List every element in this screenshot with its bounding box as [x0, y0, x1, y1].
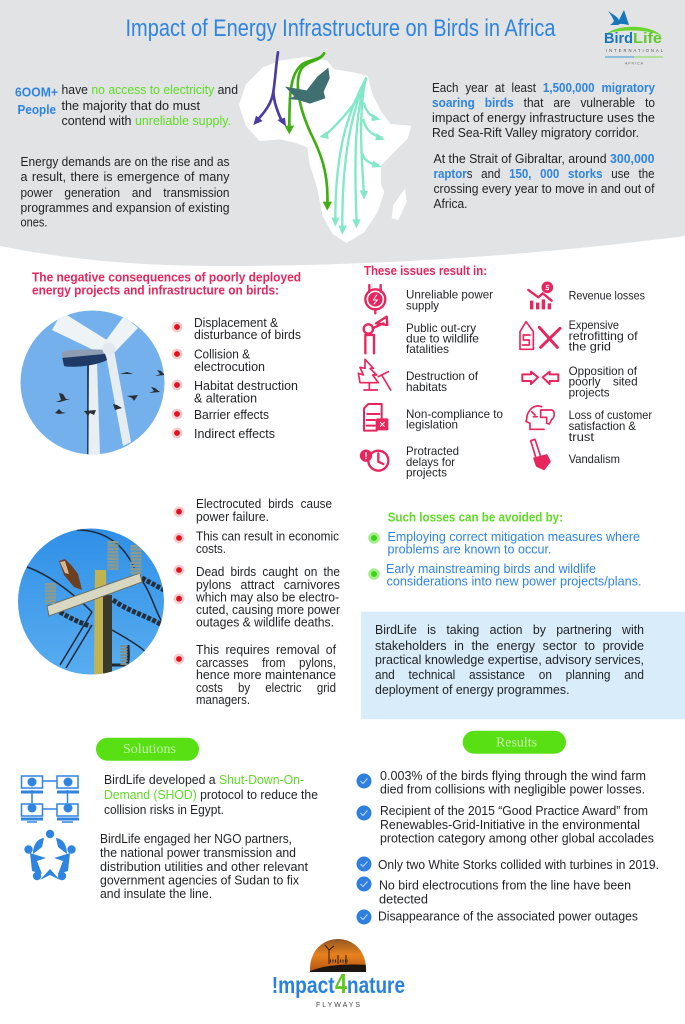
list: electrocution effects: carcasses from pylons,: [196, 656, 336, 670]
flyway: eastern mint arrows: [325, 78, 382, 230]
list: issues left column: Destruction of: [406, 370, 479, 383]
list: issues left column: projects: [406, 467, 447, 480]
icon: sunset with wind turbines: [310, 939, 366, 972]
list: issues left column: [406, 289, 503, 480]
list: electrocution effects: power failure.: [196, 510, 269, 524]
logo: Impact4nature Flyways: nature: [347, 972, 405, 998]
text: solutions: and insulate the line.: [100, 887, 212, 901]
check bullet: [356, 774, 372, 788]
callout: such losses can be avoided: problems are known to occur.: [388, 543, 552, 557]
panel: BirdLife is taking action: practical knowledge expertise, advisory services,: [375, 653, 644, 667]
map: Africa with migratory flyways: [240, 52, 410, 242]
badge: results: Results: [496, 736, 537, 751]
list: issues right column: Vandalism: [569, 453, 620, 466]
list: results: [356, 769, 659, 924]
list: issues left column: habitats: [406, 381, 447, 394]
list: electrocution effects: managers.: [196, 693, 250, 707]
stat: 600M+ people: 6OOM+: [15, 84, 58, 100]
text: no access to electricity: the majority that do must: [62, 99, 201, 113]
bullet: [173, 323, 181, 331]
text: solutions: government agencies of Sudan to fix: [100, 874, 300, 888]
Madagascar: [392, 188, 407, 220]
list: negative consequences: Barrier effects: [194, 408, 269, 422]
icons: issues: [358, 283, 560, 471]
list: issues right column: Revenue losses: [569, 290, 645, 303]
logo: BirdLife International Africa: Life: [633, 30, 662, 47]
list: electrocution effects: outages & wildlife deaths.: [196, 616, 334, 630]
list: issues right column: [569, 290, 652, 466]
list: issues right column: poorly sited: [569, 376, 638, 389]
text: no access to electricity: [62, 83, 238, 128]
flyway: purple arrows: [258, 52, 282, 121]
list: issues right column: projects: [569, 387, 610, 400]
flyway: green arrows: [289, 53, 327, 203]
list: issues right column: retrofitting of: [569, 330, 638, 343]
list: electrocution effects: costs by electric grid: [196, 681, 336, 695]
bullet: [173, 381, 181, 389]
list: results: Renewables-Grid-Initiative in the environmental: [380, 818, 640, 832]
list: electrocution effects: hence more maintenance: [196, 668, 336, 682]
text: migratory soaring birds: [432, 81, 655, 140]
list: issues right column: trust: [569, 431, 595, 444]
text: migratory soaring birds: Red Sea-Rift Valley migratory corridor.: [432, 126, 639, 140]
text: solutions: collision risks in Egypt.: [104, 803, 224, 817]
badge: solutions: [96, 738, 199, 761]
photo: hawk on electricity pylon: [15, 525, 167, 680]
list: electrocution effects: cuted, causing more power: [196, 603, 340, 617]
badge: solutions: Solutions: [123, 742, 176, 757]
text: energy demands: [20, 155, 230, 230]
bullet: [370, 534, 378, 542]
list: results: 0.003% of the birds flying through the wind farm: [380, 769, 646, 783]
list: negative consequences: electrocution: [194, 360, 265, 374]
bullet: [175, 534, 183, 542]
icon: BirdLife bird: [608, 10, 629, 25]
check bullet: [356, 806, 372, 820]
list: electrocution effects: Electrocuted birds cause: [196, 497, 332, 511]
heading: these issues result in: These issues result in:: [364, 264, 487, 278]
list: issues right column: Expensive: [569, 319, 619, 332]
text: Strait of Gibraltar: raptors and 150, 000 storks use the: [434, 167, 655, 181]
list: issues left column: Non-compliance to: [406, 408, 503, 421]
text: Strait of Gibraltar: Africa.: [434, 197, 468, 211]
logo: BirdLife International Africa: [604, 10, 664, 66]
text: Strait of Gibraltar: [434, 152, 655, 211]
logo: BirdLife International Africa: INTERNATIONAL: [606, 48, 664, 53]
text: migratory soaring birds: Each year at least 1,500,000 migratory: [432, 81, 655, 95]
bullet: [173, 350, 181, 358]
text: energy demands: programmes and expansion of existing: [20, 201, 230, 215]
list: negative consequences: & alteration: [194, 392, 257, 406]
list: issues left column: due to wildlife: [406, 333, 479, 346]
list: electrocution effects: Dead birds caught on the: [196, 565, 340, 579]
logo: Impact4nature Flyways: !mpact: [272, 972, 335, 998]
icon: price tag and tools: [520, 322, 560, 349]
icon: power plug: [365, 285, 385, 313]
stat: 600M+ people: [15, 84, 58, 117]
list: electrocution effects: which may also be electro-: [195, 591, 339, 605]
callout: such losses can be avoided: Employing correct mitigation measures where: [388, 530, 640, 544]
list: electrocution effects: [175, 497, 340, 707]
list: results: detected: [379, 893, 428, 907]
stat: 600M+ people: People: [18, 102, 56, 117]
check bullet: [356, 856, 372, 872]
text: energy demands: a result, there is emergence of many: [20, 170, 230, 184]
list: electrocution effects: costs.: [196, 542, 226, 556]
logo: Impact4nature Flyways: 4: [335, 968, 347, 999]
list: issues left column: legislation: [406, 419, 458, 432]
photo: wind turbine with birds: [18, 310, 168, 455]
icon: clock with alert: [361, 451, 388, 471]
text: solutions: [100, 773, 318, 901]
list: issues left column: delays for: [406, 456, 455, 469]
bullet: [175, 508, 183, 516]
list: electrocution effects: This requires removal of: [196, 643, 337, 657]
callout: such losses can be avoided: Early mainstreaming birds and wildlife: [386, 562, 596, 576]
panel: BirdLife is taking action: stakeholders in the energy sector to provide: [375, 639, 644, 653]
list: issues left column: fatalities: [406, 343, 449, 356]
list: electrocution effects: This can result in economic: [196, 530, 339, 544]
list: issues left column: supply: [406, 300, 439, 312]
heading: negative consequences: The negative consequences of poorly deployed: [32, 271, 301, 285]
bullet: [175, 594, 183, 603]
list: results: died from collisions with negligible power losses.: [380, 783, 645, 797]
heading: negative consequences: energy projects and infrastructure on birds:: [32, 284, 279, 298]
panel: BirdLife is taking action: [361, 612, 685, 719]
list: negative consequences: Habitat destruction: [194, 379, 298, 393]
callout: such losses can be avoided: [370, 511, 642, 589]
icon: hand with stick: [531, 439, 550, 469]
list: issues right column: satisfaction &: [569, 420, 636, 433]
list: issues right column: Loss of customer: [569, 409, 652, 422]
text: migratory soaring birds: soaring birds that are vulnerable to: [432, 96, 655, 110]
bullet: [175, 566, 183, 574]
panel: BirdLife is taking action: deployment of energy programmes.: [375, 683, 570, 697]
text: energy demands: ones.: [20, 216, 48, 230]
text: solutions: BirdLife developed a Shut-Down-On-: [104, 773, 304, 787]
text: Strait of Gibraltar: At the Strait of Gibraltar, around 300,000: [434, 152, 655, 166]
list: negative consequences: Displacement &: [194, 316, 279, 330]
text: energy demands: Energy demands are on the rise and as: [20, 155, 230, 169]
list: issues right column: the grid: [569, 341, 611, 354]
bullet: [370, 570, 378, 578]
logo: BirdLife International Africa: Bird: [604, 30, 633, 47]
check bullet: [356, 876, 372, 892]
text: no access to electricity: have no access to electricity and: [62, 83, 238, 97]
list: negative consequences: Collision &: [194, 348, 251, 362]
icon: tree and axe: [358, 359, 391, 390]
icon: networked computers: [21, 776, 79, 822]
panel: BirdLife is taking action: BirdLife is taking action by partnering with: [375, 623, 644, 637]
list: results: protection category among other global accolades: [380, 832, 654, 846]
text: solutions: the national power transmission and: [100, 846, 296, 860]
list: negative consequences: [173, 316, 301, 441]
bullet: [175, 655, 183, 663]
panel: BirdLife is taking action: and technical assistance on planning and: [375, 668, 644, 682]
callout: such losses can be avoided: considerations into new power projects/plans.: [386, 575, 642, 589]
heading: negative consequences: [32, 271, 301, 298]
check bullet: [356, 910, 372, 924]
icon: flying bird: [285, 68, 330, 104]
list: issues left column: Public out-cry: [406, 322, 476, 335]
Africa continent: [240, 58, 410, 242]
icon: head and thumbs down: [526, 406, 554, 429]
list: results: Disappearance of the associated power outages: [378, 910, 638, 924]
icon: person with megaphone: [364, 317, 387, 353]
list: issues left column: Unreliable power: [406, 289, 493, 302]
badge: results: [463, 731, 566, 754]
text: no access to electricity: contend with unreliable supply.: [62, 114, 231, 128]
icon: document with X: [364, 404, 387, 431]
text: energy demands: power generation and transmission: [20, 186, 230, 200]
text: Strait of Gibraltar: crossing every year to move in and out of: [434, 182, 655, 196]
list: results: Recipient of the 2015 “Good Practice Award” from: [380, 804, 648, 818]
text: solutions: distribution utilities and other relevant: [100, 860, 309, 874]
list: negative consequences: Indirect effects: [194, 427, 275, 441]
bullet: [173, 429, 181, 437]
list: negative consequences: disturbance of birds: [194, 328, 301, 342]
heading: Such losses can be avoided by:: [388, 511, 563, 525]
list: issues left column: Protracted: [406, 445, 459, 458]
list: results: No bird electrocutions from the line have been: [379, 879, 631, 893]
list: electrocution effects: pylons attract carnivores: [196, 578, 340, 592]
text: solutions: BirdLife engaged her NGO partners,: [100, 832, 292, 846]
list: issues right column: Opposition of: [569, 365, 638, 378]
icon: opposing arrows: [522, 372, 558, 384]
logo: Impact4nature Flyways: FLYWAYS: [316, 1002, 360, 1009]
title: Impact of Energy Infrastructure on Birds in Africa: [126, 15, 556, 42]
text: migratory soaring birds: impact of energy infrastructure uses the: [432, 111, 655, 125]
icon: revenue loss: [528, 283, 552, 309]
logo: BirdLife International Africa: AFRICA: [625, 62, 644, 66]
list: results: Only two White Storks collided with turbines in 2019.: [378, 858, 659, 872]
text: solutions: Demand (SHOD) protocol to reduce the: [104, 788, 318, 802]
logo: Impact4nature Flyways: [272, 935, 405, 1009]
bullet: [173, 410, 181, 418]
icon: circle of partners: [24, 830, 76, 880]
header background panel: [0, 0, 685, 266]
